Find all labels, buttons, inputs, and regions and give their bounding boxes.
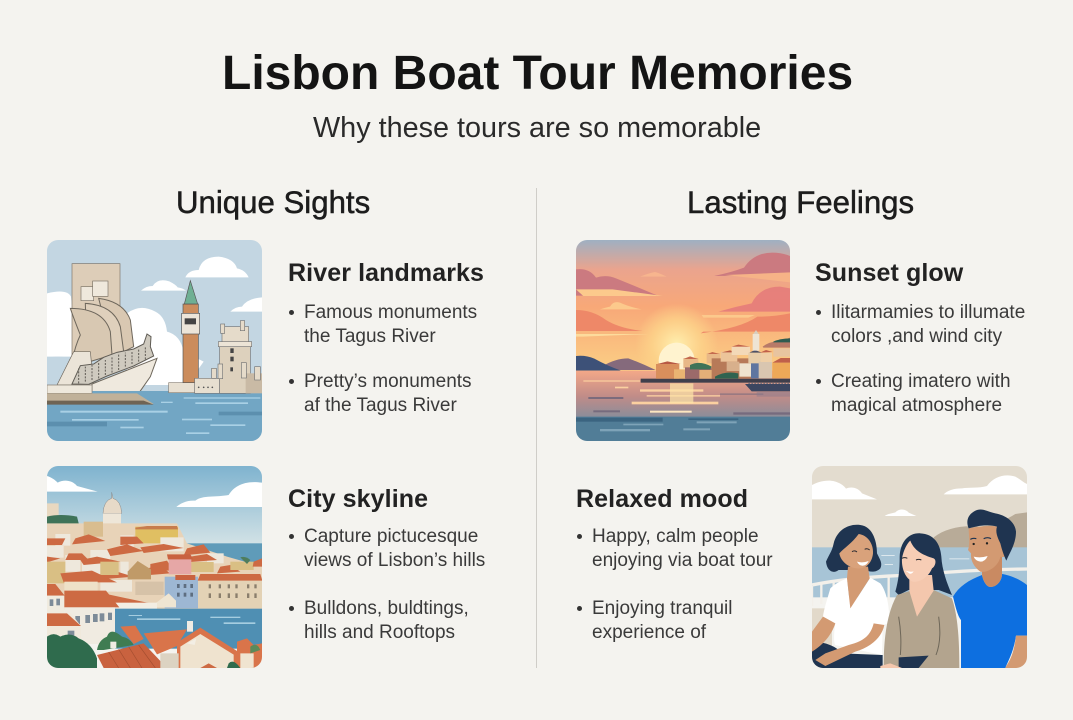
icon: sunset glow illustration bbox=[576, 240, 790, 441]
front row buildings bbox=[165, 577, 198, 608]
heading: sunset glow: Sunset glow bbox=[815, 259, 963, 287]
woman center bbox=[880, 533, 959, 668]
foreground bbox=[47, 613, 81, 641]
river bbox=[115, 609, 262, 649]
bullet: colors: colors ,and wind city bbox=[831, 326, 1002, 347]
bullet: atmosphere bbox=[831, 370, 1011, 418]
dense rooftops bbox=[47, 534, 224, 592]
bullet: capture views: Capture pictucesque bbox=[304, 526, 478, 547]
heading: relaxed mood: Relaxed mood bbox=[576, 485, 748, 513]
bullet: happy people bbox=[592, 525, 773, 573]
bullet: famous monuments bbox=[304, 301, 477, 349]
bullet: tranquil: experience of bbox=[592, 622, 706, 643]
heading: river landmarks: River landmarks bbox=[288, 259, 484, 287]
center divider bbox=[536, 188, 537, 668]
railing bbox=[812, 569, 1027, 585]
bullet: tranquil bbox=[592, 597, 732, 645]
bullet: atmosphere: magical atmosphere bbox=[831, 395, 1002, 416]
town bbox=[641, 330, 790, 383]
icon: city skyline illustration bbox=[47, 466, 262, 668]
bullet: pretty monuments: Pretty’s monuments bbox=[304, 371, 472, 392]
bullet: pretty monuments bbox=[304, 370, 472, 418]
bullet: colors: Ilitarmamies to illumate bbox=[831, 302, 1025, 323]
icon: relaxed friends illustration bbox=[812, 466, 1027, 668]
subtitle: Why these tours are so memorable bbox=[313, 112, 761, 144]
bullet: colors bbox=[831, 301, 1025, 349]
bullet: buildings: hills and Rooftops bbox=[304, 622, 455, 643]
bullet: capture views: views of Lisbon’s hills bbox=[304, 550, 485, 571]
campanile bbox=[169, 383, 197, 393]
bullet: tranquil: Enjoying tranquil bbox=[592, 598, 732, 619]
bullet: pretty monuments: af the Tagus River bbox=[304, 395, 457, 416]
water bbox=[576, 371, 790, 417]
heading: city skyline: City skyline bbox=[288, 485, 428, 513]
column heading: lasting feelings: Lasting Feelings bbox=[687, 185, 914, 220]
bullet: happy people: enjoying via boat tour bbox=[592, 550, 773, 571]
monument bbox=[72, 264, 120, 357]
bullet: famous monuments: the Tagus River bbox=[304, 326, 436, 347]
icon: river landmarks illustration bbox=[47, 240, 262, 441]
column heading: unique sights: Unique Sights bbox=[176, 185, 370, 220]
bullet: buildings: Bulldons, buldtings, bbox=[304, 598, 469, 619]
title: Lisbon Boat Tour Memories bbox=[222, 47, 853, 100]
bullet: famous monuments: Famous monuments bbox=[304, 302, 477, 323]
hills bbox=[602, 358, 656, 370]
bullet: atmosphere: Creating imatero with bbox=[831, 371, 1011, 392]
boat bbox=[745, 384, 790, 391]
belem tower bbox=[195, 378, 220, 393]
bullet: happy people: Happy, calm people bbox=[592, 526, 759, 547]
man right bbox=[953, 510, 1027, 668]
woman left bbox=[812, 525, 889, 668]
bullet: buildings bbox=[304, 597, 469, 645]
bullet: capture views bbox=[304, 525, 485, 573]
water bbox=[47, 391, 262, 441]
pink house bbox=[169, 555, 191, 574]
dome bbox=[103, 492, 122, 513]
